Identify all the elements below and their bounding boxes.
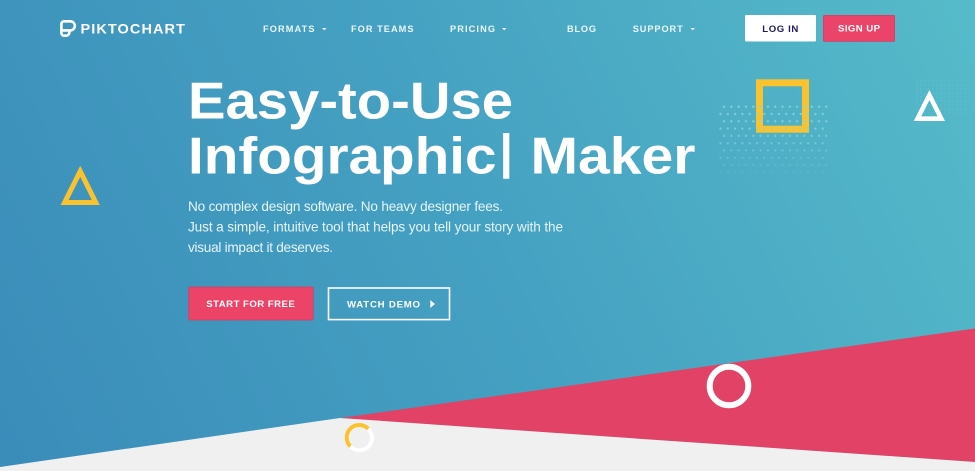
intro paragraph: Just a simple, intuitive tool that helps you tell your story with the: [188, 220, 563, 234]
icon: formats caret: [322, 28, 326, 30]
button: sign up: [823, 15, 895, 41]
nav item: support: SUPPORT: [633, 24, 683, 34]
headline line 2: |: [500, 126, 513, 179]
headline line 2: [188, 126, 696, 185]
headline line 2: Maker: [530, 127, 696, 185]
logo wordmark: PIKTOCHART: [80, 22, 186, 36]
intro paragraph: visual impact it deserves.: [188, 240, 333, 255]
button: log in: LOG IN: [762, 24, 798, 35]
decoration: white ring: [710, 367, 748, 405]
button: log in: [745, 15, 816, 42]
logo: [61, 21, 186, 36]
decoration: yellow triangle outline: [65, 171, 96, 202]
nav item: blog: BLOG: [567, 24, 596, 34]
decoration: yellow square outline: [760, 83, 806, 129]
icon: support caret: [690, 28, 695, 30]
navigation menu: [263, 24, 695, 34]
button: start for free: [189, 287, 313, 320]
light grey bottom wedge: [0, 418, 975, 471]
decoration: white triangle outline: [918, 95, 941, 119]
headline line 2: Infographic: [188, 127, 496, 185]
icon: play arrow: [430, 300, 435, 308]
icon: piktochart logo mark: [61, 21, 75, 36]
headline line 1: Easy-to-Use: [188, 72, 513, 130]
nav item: for teams: FOR TEAMS: [351, 24, 414, 34]
button: start for free: START FOR FREE: [206, 299, 295, 310]
intro paragraph: No complex design software. No heavy designer fees.: [188, 199, 503, 214]
decoration: dot grid behind white triangle: [915, 79, 967, 115]
button: sign up: SIGN UP: [838, 24, 881, 34]
decoration: dot grid behind square: [719, 105, 828, 173]
icon: pricing caret: [502, 28, 506, 30]
headline: [188, 72, 696, 185]
intro paragraph: [188, 199, 563, 255]
pink slanted band: [340, 328, 975, 462]
button: watch demo: [328, 288, 450, 320]
button: watch demo: WATCH DEMO: [347, 299, 421, 310]
nav item: pricing: PRICING: [450, 24, 495, 34]
decoration: loading ring: [347, 425, 372, 450]
nav item: formats: FORMATS: [263, 24, 314, 34]
